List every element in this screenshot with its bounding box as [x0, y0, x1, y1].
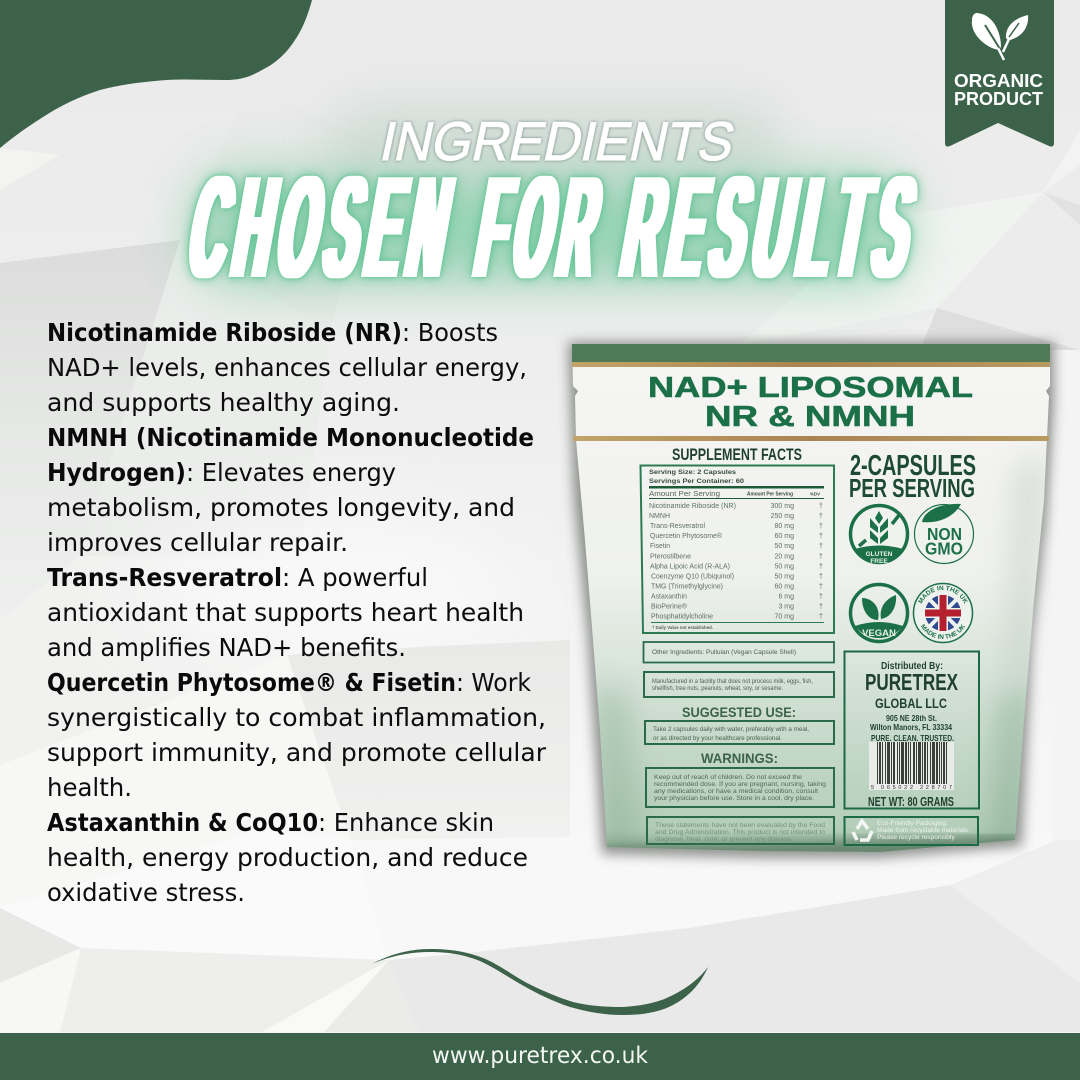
icon: gluten free: [850, 506, 908, 565]
supplement facts table: %DV: [810, 492, 820, 496]
capsules per serving: [849, 450, 976, 503]
ingredient: quercetin and fisetin: health.: [47, 773, 132, 802]
icon: made in the uk: [912, 582, 974, 644]
barcode: [869, 742, 954, 791]
ingredient rows: 50 mg: [775, 574, 794, 580]
pouch title: NR & NMNH: [705, 401, 915, 433]
ingredient rows: †: [819, 584, 823, 590]
icon: made in the uk: MADE IN THE UK: [918, 586, 968, 604]
icon: non gmo: GMO: [925, 538, 963, 558]
badge text: ORGANIC: [954, 70, 1043, 91]
supplement facts table: † Daily Value not established.: [652, 625, 713, 631]
website url: www.puretrex.co.uk: [432, 1043, 649, 1069]
gold stripe lower: [573, 436, 1049, 441]
ingredient: astaxanthin and coq10: : Enhance skin: [318, 808, 494, 837]
gold stripe top: [572, 362, 1050, 367]
distributor box: NET WT: 80 GRAMS: [868, 794, 954, 809]
pouch title: [648, 372, 973, 433]
heading: ingredients: INGREDIENTS: [375, 112, 740, 172]
supplement facts table: Amount Per Serving: [747, 492, 793, 498]
ingredient: nicotinamide riboside: Nicotinamide Riboside (NR): [47, 318, 402, 347]
warnings box: Keep out of reach of children. Do not exceed the: [654, 775, 803, 781]
heading: chosen for results: CHOSEN: [180, 146, 470, 308]
ingredient rows: 250 mg: [771, 513, 794, 520]
ingredient rows: 20 mg: [775, 554, 794, 560]
footer bar: [0, 1033, 1080, 1080]
pouch shadow: [568, 342, 1054, 858]
ingredient: trans-resveratrol: antioxidant that supports heart health: [47, 598, 524, 627]
ingredient: nicotinamide riboside: [47, 318, 527, 417]
warnings heading: WARNINGS:: [701, 750, 778, 766]
ingredient: quercetin and fisetin: : Work: [456, 668, 532, 697]
ingredient: trans-resveratrol: : A powerful: [282, 563, 428, 592]
allergen box: shellfish, tree nuts, peanuts, wheat, soy, or sesame.: [652, 686, 783, 692]
ingredient rows: 50 mg: [775, 543, 794, 550]
badge: organic product: PRODUCT: [954, 88, 1044, 109]
ingredient: trans-resveratrol: and amplifies NAD+ benefits.: [47, 633, 406, 662]
other ingredients box: [644, 642, 834, 662]
ingredient rows: 3 mg: [778, 604, 794, 610]
heading: chosen for results: FOR: [467, 146, 619, 308]
allergen box: Manufactured in a facility that does not process milk, eggs, fish,: [652, 679, 813, 685]
fda disclaimer box: and Drug Administration. This product is not intended to: [655, 830, 826, 836]
warnings box: any medications, or have a medical condition, consult: [654, 789, 818, 795]
decorative swoosh: [372, 949, 708, 1015]
ingredient: astaxanthin and coq10: oxidative stress.: [47, 878, 245, 907]
ingredient rows: †: [819, 543, 823, 550]
capsules per serving: 2-CAPSULES: [850, 450, 976, 482]
ingredient rows: NMNH: [649, 513, 670, 520]
eco packaging box: Made from recyclable materials.: [877, 828, 970, 834]
ingredient rows: †: [819, 554, 823, 560]
ingredient descriptions: [47, 318, 547, 907]
warnings box: recommended dose. If you are pregnant, nursing, taking: [654, 782, 826, 788]
distributor box: PURE. CLEAN. TRUSTED.: [871, 733, 954, 743]
distributor box: 905 NE 28th St.: [886, 713, 937, 723]
icon: gluten free: GLUTEN: [866, 551, 893, 558]
fda disclaimer box: diagnose, treat, cure, or prevent any disease.: [655, 837, 793, 843]
ingredient: nmnh: improves cellular repair.: [47, 528, 348, 557]
ingredient rows: Quercetin Phytosome®: [650, 532, 723, 540]
icon: non gmo: NON: [927, 524, 962, 544]
ingredient rows: Pterostilbene: [650, 554, 691, 560]
ingredient rows: 60 mg: [775, 533, 794, 540]
allergen box: [644, 672, 834, 697]
ingredient rows: Alpha Lipoic Acid (R-ALA): [650, 564, 730, 570]
supplement facts table: [640, 466, 834, 633]
ingredient: nmnh: Hydrogen): [47, 458, 186, 487]
ingredient: nicotinamide riboside: : Boosts: [402, 318, 498, 347]
icon: vegan: [850, 584, 908, 642]
ingredient: trans-resveratrol: Trans-Resveratrol: [47, 563, 282, 592]
warnings box: your physician before use. Store in a cool, dry place.: [654, 796, 814, 802]
ingredient rows: BioPerine®: [651, 602, 688, 610]
pouch title: NAD+ LIPOSOMAL: [648, 372, 973, 404]
icon: non gmo: [914, 504, 974, 564]
ingredient rows: Coenzyme Q10 (Ubiquinol): [651, 574, 734, 580]
ingredient rows: †: [819, 604, 823, 610]
eco packaging box: Please recycle responsibly.: [877, 835, 956, 841]
ingredient rows: †: [819, 564, 823, 570]
ingredient rows: 60 mg: [775, 584, 794, 590]
ingredient: quercetin and fisetin: Quercetin Phytosome® & Fisetin: [47, 668, 456, 697]
ingredient: nicotinamide riboside: and supports healthy aging.: [47, 388, 400, 417]
icon: gluten free: FREE: [870, 558, 888, 565]
pouch body: [572, 344, 1050, 860]
ingredient rows: †: [819, 614, 823, 620]
barcode: 5 065022 228707: [871, 785, 952, 791]
suggested use box: [645, 721, 834, 744]
ingredient rows: 50 mg: [775, 564, 794, 570]
ingredient rows: Astaxanthin: [651, 594, 687, 600]
ingredient rows: Nicotinamide Riboside (NR): [649, 503, 736, 510]
ingredient: nmnh: [47, 423, 534, 557]
distributor box: PURETREX: [865, 669, 958, 695]
ingredient rows: TMG (Trimethylglycine): [651, 584, 723, 590]
ingredient rows: †: [819, 594, 823, 600]
ingredient rows: 300 mg: [771, 503, 794, 510]
icon: recycle: [853, 821, 872, 840]
ingredient rows: 70 mg: [775, 614, 794, 620]
ingredient: astaxanthin and coq10: [47, 808, 528, 907]
capsules per serving: PER SERVING: [849, 475, 975, 503]
distributor box: [844, 652, 979, 809]
ingredient rows: †: [819, 523, 823, 530]
badge: organic product: [945, 0, 1054, 147]
supplement facts table: Servings Per Container: 60: [649, 478, 744, 485]
ingredient: nmnh: : Elevates energy: [186, 458, 396, 487]
suggested use box: or as directed by your healthcare professional.: [653, 736, 782, 742]
supplement facts table: Serving Size: 2 Capsules: [649, 469, 736, 476]
ingredient: astaxanthin and coq10: health, energy production, and reduce: [47, 843, 528, 872]
ingredient: astaxanthin and coq10: Astaxanthin & CoQ10: [47, 808, 318, 837]
ingredient: quercetin and fisetin: synergistically to combat inflammation,: [47, 703, 546, 732]
eco packaging box: [844, 817, 978, 845]
suggested use box: Take 2 capsules daily with water, preferably with a meal,: [653, 727, 809, 733]
suggested use heading: SUGGESTED USE:: [682, 704, 796, 720]
fda disclaimer box: [647, 817, 834, 844]
ingredient rows: Trans-Resveratrol: [650, 523, 705, 530]
top-left green blob: [0, 0, 312, 148]
ingredient: trans-resveratrol: [47, 563, 524, 662]
top green band: [572, 344, 1050, 362]
distributor box: Wilton Manors, FL 33334: [870, 722, 952, 732]
title glow: [195, 105, 905, 283]
ingredient rows: †: [819, 533, 823, 540]
product pouch: [560, 334, 1062, 866]
distributor box: Distributed By:: [881, 661, 943, 672]
ingredient rows: [649, 503, 823, 620]
other ingredients box: Other Ingredients: Pullulan (Vegan Capsule Shell): [652, 649, 796, 656]
ingredient: nicotinamide riboside: NAD+ levels, enhances cellular energy,: [47, 353, 527, 382]
fda disclaimer box: These statements have not been evaluated by the Food: [655, 823, 825, 829]
ingredient rows: Fisetin: [650, 543, 670, 550]
icon: made in the uk: MADE IN THE UK: [920, 624, 966, 639]
warnings box: [646, 768, 834, 807]
ingredient rows: 6 mg: [778, 594, 794, 600]
distributor box: GLOBAL LLC: [875, 695, 947, 711]
ingredient rows: †: [819, 503, 823, 510]
ingredient rows: 80 mg: [775, 523, 794, 530]
ingredient rows: †: [819, 574, 823, 580]
ingredient: nmnh: NMNH (Nicotinamide Mononucleotide: [47, 423, 534, 452]
ingredient: quercetin and fisetin: support immunity, and promote cellular: [47, 738, 547, 767]
ingredient rows: Phosphatidylcholine: [651, 614, 713, 620]
icon: vegan: VEGAN: [862, 628, 896, 639]
icon: leaves: [972, 13, 1028, 60]
ingredient: quercetin and fisetin: [47, 668, 547, 802]
supplement facts heading: SUPPLEMENT FACTS: [672, 446, 802, 464]
ingredient rows: †: [819, 513, 823, 520]
supplement facts table: Amount Per Serving: [649, 489, 720, 498]
eco packaging box: Eco-Friendly Packaging:: [877, 821, 948, 827]
ingredient: nmnh: metabolism, promotes longevity, and: [47, 493, 515, 522]
